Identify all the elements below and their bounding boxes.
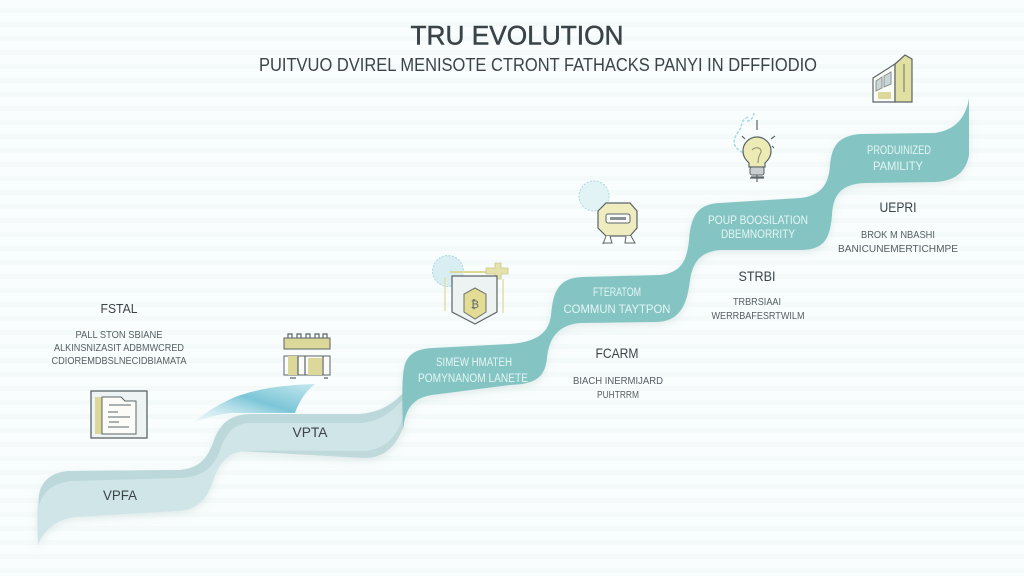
- text block: strbi stage: WERRBAFESRTWILM: [712, 310, 804, 322]
- icon: shield with coin: ₿: [471, 299, 479, 311]
- ribbon bottom edge shading: [240, 416, 404, 458]
- step 6 label: PRODUINIZED: [867, 145, 931, 157]
- text block: uepri stage: UEPRI: [880, 199, 916, 215]
- step 3 label: SIMEW HMATEH: [436, 357, 512, 369]
- text block: uepri stage: BANICUNEMERTICHMPE: [838, 243, 958, 255]
- icon: folder document: [91, 391, 147, 438]
- text block: uepri stage: BROK M NBASHI: [861, 229, 935, 241]
- text block: first stage: PALL STON SBIANE: [76, 329, 162, 341]
- icon: building blocks: [284, 334, 330, 378]
- text block: form stage: BIACH INERMIJARD: [573, 375, 663, 387]
- text block: first stage: FSTAL: [100, 301, 138, 316]
- ribbon: light lower steps: [37, 392, 404, 545]
- title: TRU EVOLUTION: [410, 20, 624, 50]
- step 6 label: PAMILITY: [873, 161, 923, 173]
- step 6 label: [867, 145, 931, 173]
- step 1 label: VPFA: [103, 487, 138, 503]
- text block: form stage: FCARM: [596, 345, 638, 361]
- icon: shield with coin: [432, 256, 508, 324]
- step 3 label: [418, 357, 528, 385]
- icon: light bulb: [734, 113, 775, 182]
- step 5 label: DBEMNORRITY: [721, 229, 795, 241]
- text block: strbi stage: STRBI: [738, 268, 776, 284]
- text block: first stage: CDIOREMDBSLNECIDBIAMATA: [52, 355, 186, 367]
- swoosh accent: [193, 384, 315, 423]
- icon: building: [873, 55, 912, 102]
- text block: uepri stage: [838, 199, 958, 255]
- step 3 label: POMYNANOM LANETE: [418, 373, 528, 385]
- step 5 label: POUP BOOSILATION: [708, 215, 808, 227]
- step 4 label: FTERATOM: [593, 287, 641, 299]
- step 4 label: [564, 287, 670, 316]
- ribbon: teal upper steps: [402, 98, 969, 430]
- step 4 label: COMMUN TAYTPON: [564, 304, 670, 316]
- text block: first stage: ALKINSNIZASIT ADBMWCRED: [54, 342, 184, 354]
- text block: first stage: [52, 301, 186, 367]
- step 2 label: VPTA: [292, 424, 328, 440]
- step 5 label: [708, 215, 808, 241]
- text block: form stage: PUHTRRM: [597, 389, 639, 401]
- icon: robot with cloud: [579, 181, 637, 244]
- text block: strbi stage: TRBRSIAAI: [733, 296, 781, 308]
- text block: form stage: [573, 345, 663, 401]
- subtitle: PUITVUO DVIREL MENISOTE CTRONT FATHACKS PANYI IN DFFFIODIO: [259, 55, 817, 75]
- text block: strbi stage: [712, 268, 804, 322]
